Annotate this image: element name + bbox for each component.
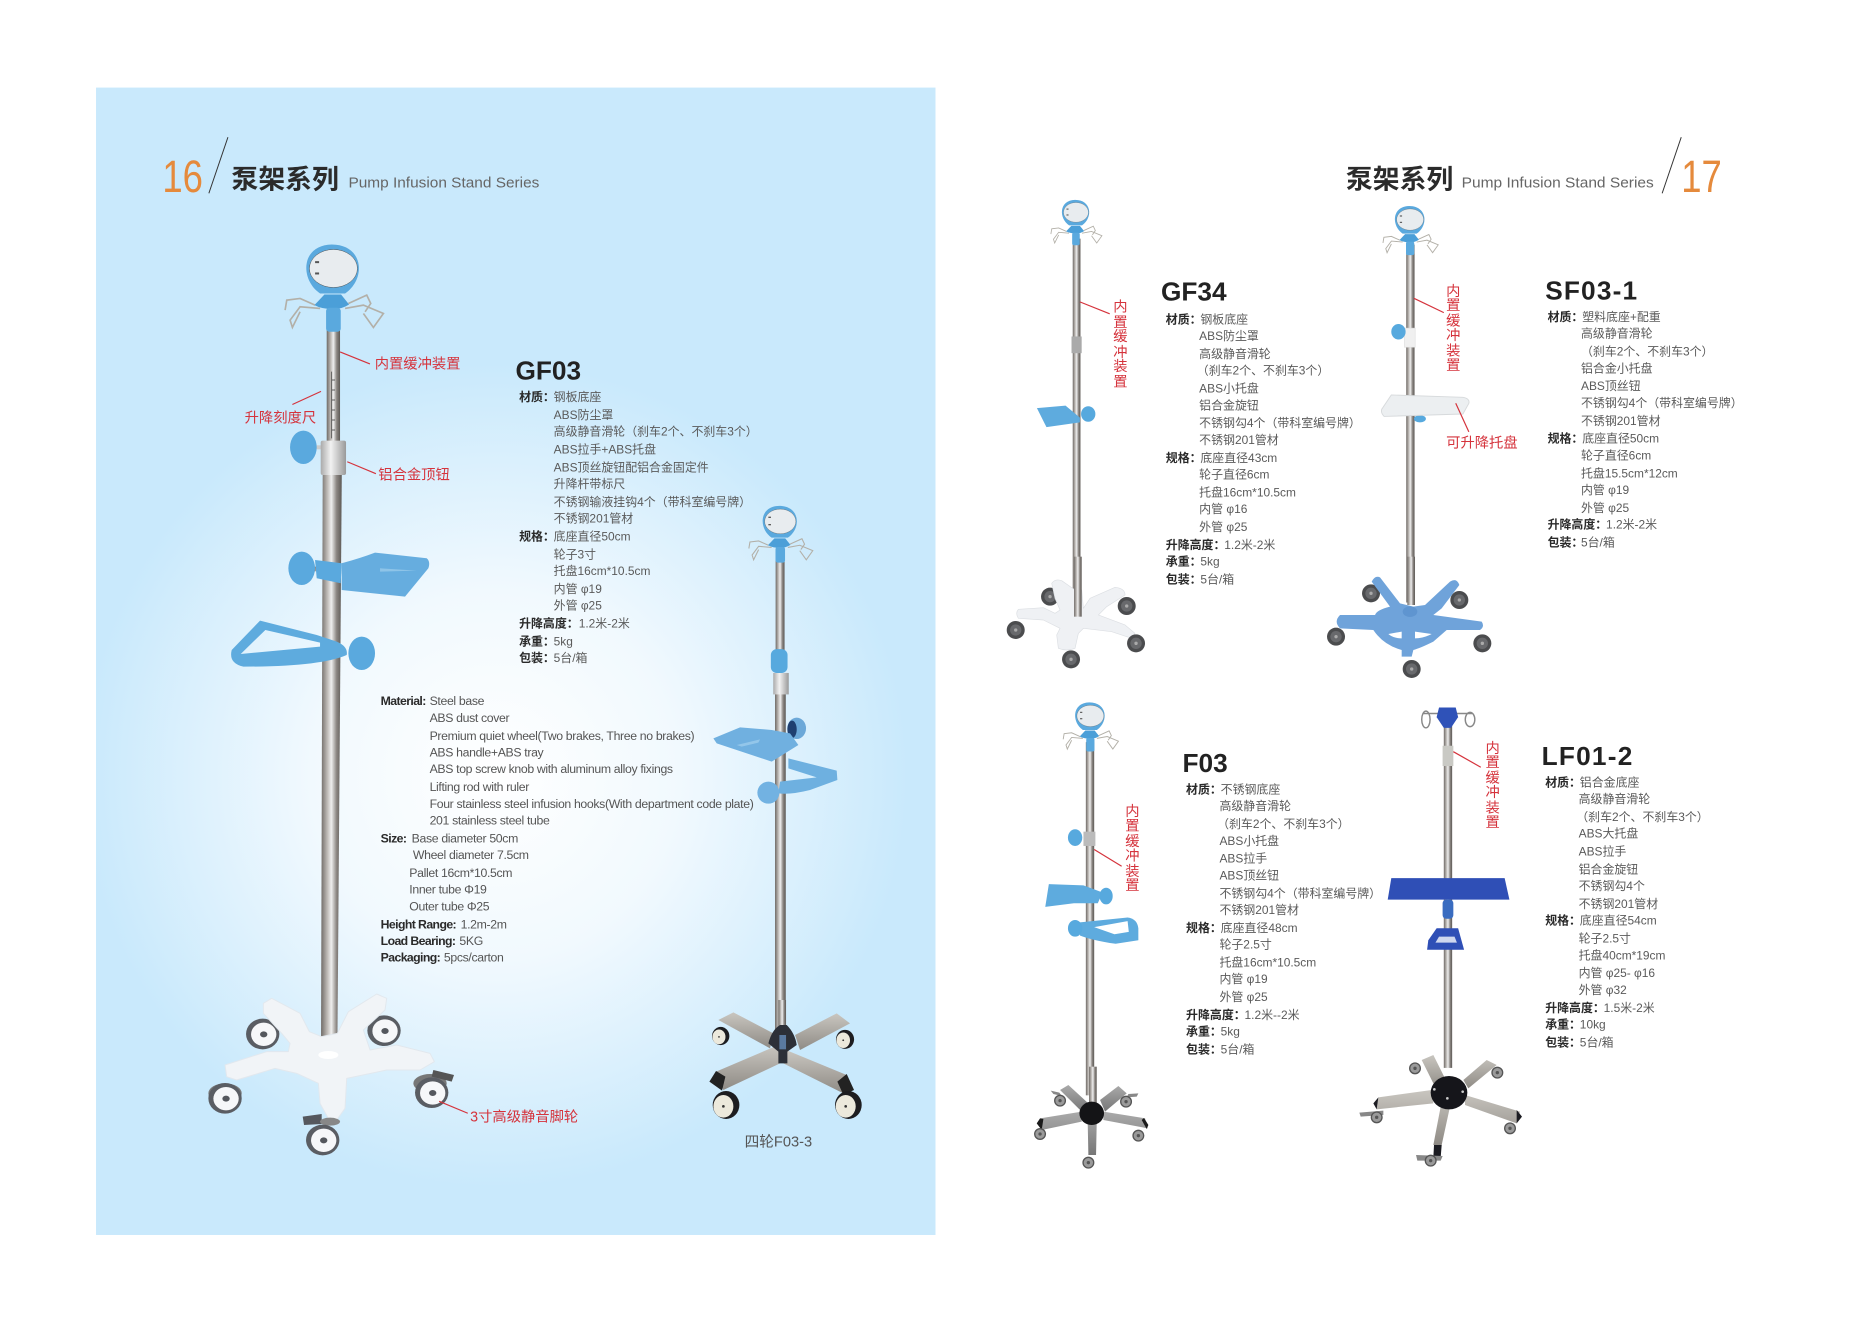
English spec text: GF03: 1.2m-2m (461, 917, 507, 931)
spec text: LF01-2: 材质： (1545, 775, 1581, 789)
spec text: GF03: 升降杆带标尺 (554, 477, 625, 491)
right page header: 泵架系列 (1346, 165, 1453, 195)
spec text: GF34: 包装： (1166, 572, 1202, 586)
English spec text: GF03: Lifting rod with ruler (430, 780, 529, 794)
spec text: F03: 外管 φ25 (1219, 990, 1268, 1004)
right page header: 17 (1681, 151, 1722, 202)
English spec text: GF03: Load Bearing: (381, 934, 455, 948)
spec text: GF03: 承重： (519, 635, 555, 649)
spec text: F03: 5台/箱 (1221, 1043, 1255, 1057)
spec text: SF03-1: 托盘15.5cm*12cm (1581, 466, 1678, 480)
callout: GF34: 内 (1113, 298, 1128, 315)
spec text: SF03-1: 底座直径50cm (1582, 432, 1659, 446)
callout: GF34: 冲 (1113, 344, 1128, 361)
spec text: GF34: 5台/箱 (1200, 572, 1234, 586)
English spec text: GF03: 201 stainless steel tube (430, 813, 550, 827)
spec text: SF03-1: 内管 φ19 (1581, 483, 1630, 497)
spec text: SF03-1: 不锈钢勾4个（带科室编号牌） (1581, 396, 1743, 410)
spec text: GF03 (516, 355, 761, 665)
product illustration: LF01-2 stand (1359, 708, 1522, 1166)
spec text: SF03-1 (1545, 275, 1746, 549)
left page header: 16 (162, 151, 203, 202)
callout: LF01-2: 置 (1486, 815, 1500, 831)
callout: LF01-2: 冲 (1486, 784, 1500, 801)
left page panel (96, 88, 936, 1235)
spec text: SF03-1: 轮子直径6cm (1581, 448, 1651, 462)
white base (208, 994, 454, 1155)
spec text: LF01-2: 1.5米-2米 (1604, 1001, 1655, 1015)
callout: LF01-2: 置 (1486, 755, 1500, 771)
English spec text: GF03: ABS handle+ABS tray (430, 745, 545, 759)
English spec text: GF03: Material: (381, 694, 426, 708)
spec text: GF34: ABS小托盘 (1199, 382, 1259, 396)
callout: LF01-2: 装 (1486, 800, 1500, 817)
tray and handle (713, 718, 837, 804)
English spec text: GF03: Height Range: (381, 917, 456, 931)
spec text: LF01-2: （刹车2个、不刹车3个） (1576, 810, 1709, 824)
spec text: SF03-1: 外管 φ25 (1581, 501, 1630, 515)
spec text: F03: 不锈钢201管材 (1219, 903, 1299, 917)
spec text: F03: （刹车2个、不刹车3个） (1217, 817, 1350, 831)
callout: GF34: 缓 (1113, 328, 1128, 345)
spec text: LF01-2: 高级静音滑轮 (1579, 792, 1650, 806)
spec text: GF03: 1.2米-2米 (579, 617, 630, 631)
callouts: SF03-1 (1414, 283, 1518, 451)
spec text: F03: 承重： (1186, 1025, 1222, 1039)
spec text: GF03: 轮子3寸 (554, 547, 596, 561)
spec text: SF03-1: ABS顶丝钮 (1581, 379, 1641, 393)
spec text: SF03-1: 5台/箱 (1581, 535, 1615, 549)
spec text: SF03-1: 1.2米-2米 (1606, 518, 1657, 532)
spec text: GF03: 不锈钢输液挂钩4个（带科室编号牌） (554, 495, 751, 509)
callouts: SF03-1: 置 (1446, 358, 1460, 374)
callout: LF01-2: 缓 (1486, 770, 1500, 787)
spec text: GF34: 5kg (1200, 555, 1220, 569)
callout: F03: 冲 (1125, 847, 1140, 864)
spec text: GF34: 钢板底座 (1200, 312, 1248, 326)
spec text: GF03: 高级静音滑轮（刹车2个、不刹车3个） (554, 425, 758, 439)
spec text: SF03-1: 规格： (1548, 432, 1583, 446)
spec text: GF34: 材质： (1166, 312, 1202, 326)
product illustration: four-wheel F03-3 stand (709, 506, 862, 1119)
left page header (162, 137, 539, 202)
spec text: GF03: 底座直径50cm (554, 530, 631, 544)
handle (231, 621, 347, 667)
callouts: GF03: 3寸高级静音脚轮 (470, 1109, 578, 1126)
product illustration: SF03-1 stand (1327, 206, 1491, 678)
callouts: SF03-1: 装 (1446, 343, 1460, 360)
spec text: SF03-1: 材质： (1548, 310, 1583, 324)
English spec text: GF03: Outer tube Φ25 (409, 899, 490, 913)
English spec text: GF03: 5KG (459, 934, 483, 948)
spec text: F03: 轮子2.5寸 (1219, 938, 1272, 952)
spec text: SF03-1: 升降高度： (1548, 518, 1607, 532)
spec text: LF01-2: 包装： (1545, 1035, 1581, 1049)
spec text: LF01-2: 不锈钢201管材 (1579, 897, 1658, 911)
spec text: SF03-1: （刹车2个、不刹车3个） (1581, 345, 1713, 359)
spec text: LF01-2: 轮子2.5寸 (1579, 932, 1631, 946)
callout: F03: 置 (1125, 818, 1140, 834)
spec text: GF34: 升降高度： (1166, 538, 1225, 552)
spec text: F03: ABS顶丝钮 (1219, 868, 1279, 882)
English spec text: GF03: Size: (381, 831, 406, 845)
spec text: GF34: ABS防尘罩 (1199, 329, 1259, 343)
lower pole (321, 475, 342, 1052)
spec text: SF03-1: 高级静音滑轮 (1581, 327, 1653, 341)
spec text: GF34: 铝合金旋钮 (1199, 398, 1259, 412)
spec text: GF03: 材质： (519, 390, 555, 404)
X base (709, 1000, 862, 1119)
callout: F03: 装 (1125, 863, 1140, 880)
spec text: F03: 5kg (1221, 1025, 1240, 1039)
spec text: LF01-2: ABS大托盘 (1579, 827, 1638, 841)
spec text: GF34: 托盘16cm*10.5cm (1199, 485, 1296, 499)
spec text: GF34: 规格： (1166, 451, 1202, 465)
English spec text: GF03: ABS dust cover (430, 711, 510, 725)
spec text: GF03: 内管 φ19 (554, 582, 602, 596)
callouts: GF03: 内置缓冲装置 (375, 356, 460, 373)
callout: GF34: 置 (1113, 375, 1128, 391)
spec text: GF34: 承重： (1166, 555, 1202, 569)
callout: F03: 内 (1125, 803, 1140, 820)
spec text: GF34: （刹车2个、不刹车3个） (1197, 364, 1329, 378)
spec text: F03: F03 (1182, 748, 1228, 778)
spec text: LF01-2: ABS拉手 (1579, 845, 1626, 859)
spec text: GF03: ABS防尘罩 (554, 408, 613, 422)
spec text: SF03-1: 塑料底座+配重 (1582, 310, 1661, 324)
callout: GF34: 置 (1113, 315, 1128, 331)
upper assembly (231, 330, 429, 670)
spec text: F03: 1.2米--2米 (1245, 1008, 1300, 1022)
callouts: SF03-1: 内 (1446, 283, 1460, 300)
spec text: LF01-2: LF01-2 (1542, 741, 1632, 771)
callouts: SF03-1: 置 (1446, 298, 1460, 314)
spec text: GF03: 5台/箱 (554, 651, 588, 665)
spec text: F03: ABS拉手 (1219, 852, 1267, 866)
English spec text: GF03: Inner tube Φ19 (409, 883, 487, 897)
tray (342, 553, 429, 597)
spec text: F03: 内管 φ19 (1219, 972, 1268, 986)
spec text: F03: 不锈钢底座 (1221, 782, 1280, 796)
spec text: LF01-2: 铝合金底座 (1580, 775, 1640, 789)
spec text: GF34: 内管 φ16 (1199, 502, 1248, 516)
spec text: SF03-1: SF03-1 (1545, 275, 1637, 305)
product illustration: GF03 stand (208, 244, 454, 1155)
English spec text: GF03: Wheel diameter 7.5cm (413, 848, 529, 862)
spec text: LF01-2: 10kg (1580, 1018, 1606, 1032)
spec text: LF01-2: 外管 φ32 (1579, 983, 1627, 997)
callout: GF34 (1080, 298, 1128, 391)
spec text: LF01-2: 规格： (1545, 914, 1581, 928)
English spec text: GF03: Pallet 16cm*10.5cm (409, 866, 512, 880)
spec text: GF03: 5kg (554, 635, 573, 649)
callout: F03: 缓 (1125, 833, 1140, 850)
spec text: F03: 材质： (1186, 782, 1222, 796)
spec text: LF01-2: 升降高度： (1545, 1001, 1605, 1015)
spec text: GF34: 轮子直径6cm (1199, 467, 1269, 481)
callouts: SF03-1: 可升降托盘 (1446, 433, 1518, 451)
spec text: F03: 高级静音滑轮 (1219, 799, 1291, 813)
spec text: SF03-1: 包装： (1548, 535, 1583, 549)
product illustration: F03 stand (1035, 702, 1148, 1168)
spec text: F03: 底座直径48cm (1221, 921, 1298, 935)
English spec text: GF03: Packaging: (381, 951, 440, 965)
spec text: GF03: 钢板底座 (554, 390, 601, 404)
spec text: F03: 托盘16cm*10.5cm (1219, 955, 1316, 969)
callout: F03: 置 (1125, 878, 1140, 894)
spec text: GF34: 外管 φ25 (1199, 520, 1248, 534)
spec text: GF03: ABS拉手+ABS托盘 (554, 442, 656, 456)
spec text: GF03: 包装： (519, 651, 555, 665)
callouts: SF03-1: 缓 (1446, 313, 1460, 330)
spec text: GF03: 外管 φ25 (554, 599, 602, 613)
spec text: GF03: ABS顶丝旋钮配铝合金固定件 (554, 460, 709, 474)
callouts: GF03 (245, 352, 578, 1126)
callout: LF01-2 (1453, 740, 1500, 831)
spec text: LF01-2: 不锈钢勾4个 (1579, 879, 1645, 893)
spec text: GF03: GF03 (516, 355, 581, 385)
left page header: Pump Infusion Stand Series (348, 174, 539, 191)
caption: four-wheel F03-3: 四轮F03-3 (745, 1134, 812, 1151)
product illustration: GF34 stand (1007, 200, 1145, 668)
English spec text: GF03: ABS top screw knob with aluminum alloy fixings (430, 762, 673, 776)
callouts: SF03-1: 冲 (1446, 327, 1460, 344)
spec text: GF34: 底座直径43cm (1200, 451, 1277, 465)
left page header: 泵架系列 (232, 165, 339, 195)
spec text: GF34 (1161, 277, 1364, 586)
spec text: LF01-2: 5台/箱 (1580, 1035, 1614, 1049)
spec text: GF34: 1.2米-2米 (1224, 538, 1275, 552)
English spec text: GF03: Four stainless steel infusion hooks(With department code plate) (430, 797, 754, 811)
spec text: F03: 包装： (1186, 1043, 1222, 1057)
spec text: GF34: GF34 (1161, 277, 1227, 307)
spec text: F03: ABS小托盘 (1219, 834, 1279, 848)
spec text: F03: 规格： (1186, 921, 1222, 935)
callout: LF01-2: 内 (1486, 740, 1500, 757)
spec text: LF01-2: 承重： (1545, 1018, 1581, 1032)
spec text: SF03-1: 铝合金小托盘 (1581, 361, 1653, 375)
spec text: SF03-1: 不锈钢201管材 (1581, 414, 1661, 428)
spec text: GF03: 不锈钢201管材 (554, 512, 633, 526)
callouts: GF03: 升降刻度尺 (245, 409, 316, 426)
English spec text: GF03: Steel base (430, 694, 485, 708)
spec text: GF03: 升降高度： (519, 617, 579, 631)
spec text: GF03: 托盘16cm*10.5cm (554, 564, 650, 578)
spec text: F03: 不锈钢勾4个（带科室编号牌） (1219, 886, 1381, 900)
spec text: LF01-2: 铝合金旋钮 (1579, 862, 1638, 876)
spec text: LF01-2: 托盘40cm*19cm (1579, 948, 1665, 962)
callout: GF34: 装 (1113, 358, 1128, 375)
spec text: GF34: 不锈钢201管材 (1199, 433, 1279, 447)
right page header: Pump Infusion Stand Series (1462, 174, 1654, 191)
right page header (1346, 137, 1722, 202)
spec text: LF01-2: 底座直径54cm (1580, 914, 1657, 928)
spec text: F03: 升降高度： (1186, 1008, 1246, 1022)
English spec text: GF03: Premium quiet wheel(Two brakes, Three no brakes) (430, 729, 695, 743)
callout: F03 (1094, 803, 1140, 894)
spec text: GF34: 不锈钢勾4个（带科室编号牌） (1199, 416, 1361, 430)
English spec text: GF03: Base diameter 50cm (412, 831, 518, 845)
spec text: GF03: 规格： (519, 530, 555, 544)
callouts: GF03: 铝合金顶钮 (378, 467, 450, 484)
spec text: GF34: 高级静音滑轮 (1199, 347, 1271, 361)
spec text: F03 (1182, 748, 1384, 1057)
English spec text: GF03: 5pcs/carton (444, 951, 504, 965)
spec text: LF01-2: 内管 φ25- φ16 (1579, 966, 1655, 980)
spec text: LF01-2 (1542, 741, 1712, 1049)
